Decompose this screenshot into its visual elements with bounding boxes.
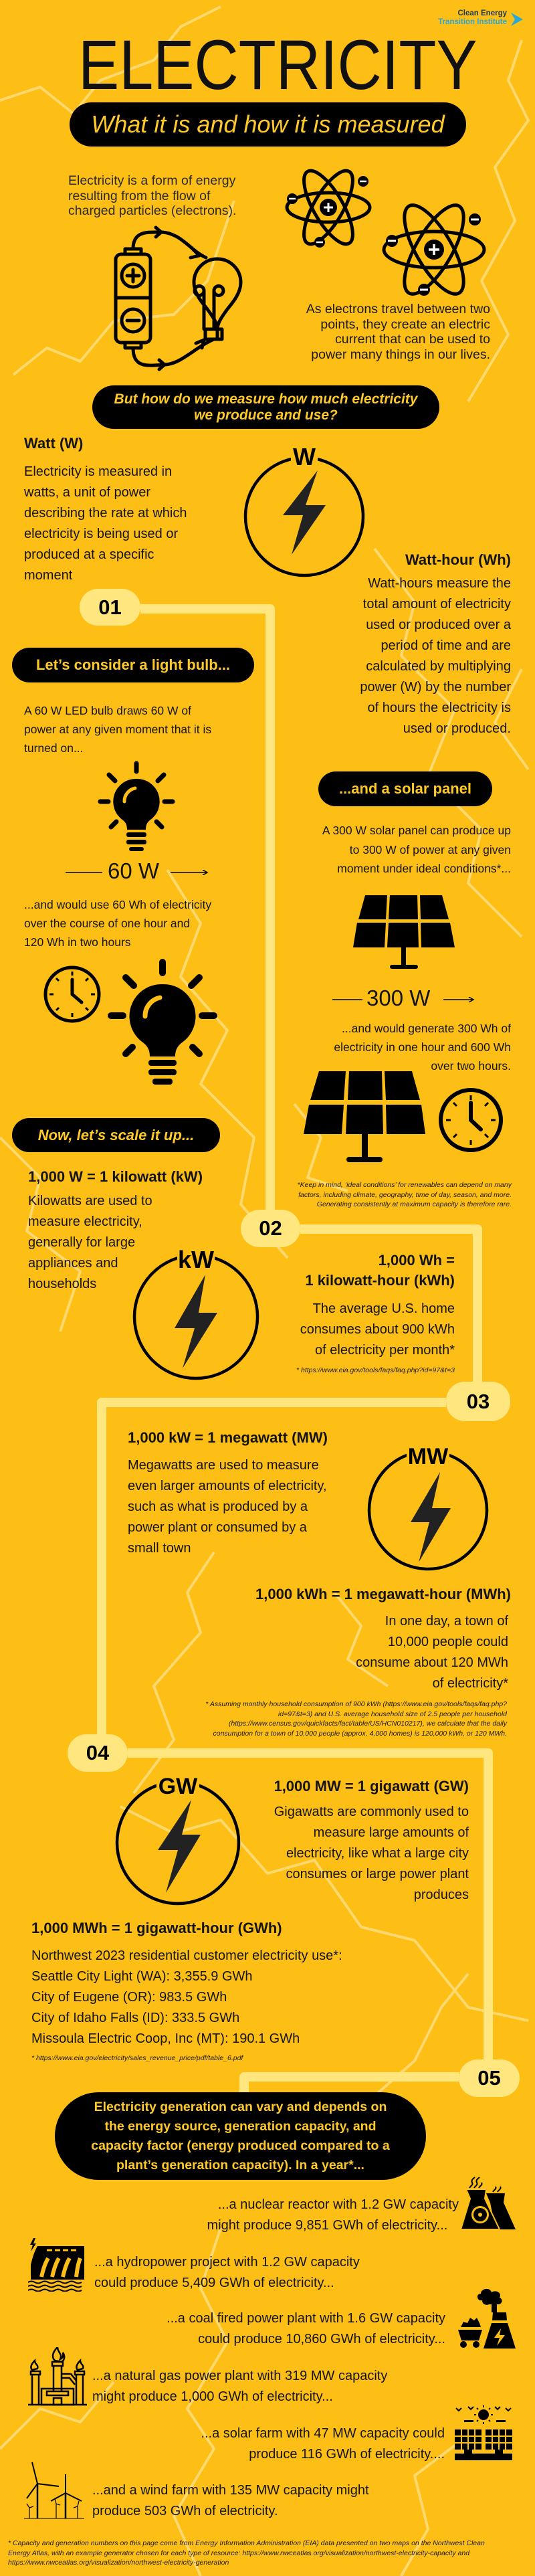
utility list: Northwest 2023 residential customer electricity use*: [31,1948,342,1963]
kilowatt-hour text: consumes about 900 kWh [300,1322,455,1337]
utility list: City of Idaho Falls (ID): 333.5 GWh [31,2011,239,2025]
footnote: ideal conditions: factors, including climate, geography, time of day, season, and more. [298,1191,512,1199]
megawatt-hour text: of electricity* [433,1676,508,1691]
icon: hydropower [28,2238,84,2292]
generation pill: the energy source, generation capacity, and [104,2118,376,2133]
gigawatt text: measure large amounts of [314,1825,469,1840]
60 W arrow [66,858,209,883]
footnote: town calc: consumption for a town of 10,000 people (approx. 4,000 homes) is 120,000 kWh, or 120 MWh. [213,1730,507,1738]
watt-hour text: used or produced over a [366,618,511,632]
utility list: Seattle City Light (WA): 3,355.9 GWh [31,1969,253,1984]
solar text 1 [322,824,511,875]
kilowatt text: appliances and [28,1256,118,1271]
kilowatt-hour heading: 1,000 Wh = [379,1252,455,1269]
icon: solar farm [455,2405,512,2463]
natural gas text: might produce 1,000 GWh of electricity... [92,2389,333,2404]
question pill [92,385,439,429]
watt-hour heading: Watt-hour (Wh) [405,551,511,568]
03 marker [446,1382,510,1421]
natural gas text: ...a natural gas power plant with 319 MW capacity [92,2369,387,2383]
footnote: data sources: Energy Atlas, with an example generator chosen for each type of resource: https://www.nwceatlas.org/visualization/northwest-electricity-capacity and [8,2549,469,2557]
footnote: eia faq: * https://www.eia.gov/tools/faqs/faq.php?id=97&t=3 [296,1366,455,1374]
generation pill: capacity factor (energy produced compared to a [91,2138,390,2153]
wind text: produce 503 GWh of electricity. [92,2504,278,2518]
solar text 1: moment under ideal conditions*... [337,862,511,875]
01 marker [80,589,140,626]
solar panel pill: ...and a solar panel [339,780,471,797]
generation pill [55,2092,426,2180]
text: electrons travel: As electrons travel between two [306,302,490,316]
300 W arrow: 300 W [366,986,430,1010]
kilowatt text: measure electricity, [28,1214,142,1229]
03 marker: 03 [467,1389,490,1413]
watt text: moment [24,568,72,583]
footnote: town calc: * Assuming monthly household consumption of 900 kWh (https://www.eia.gov/tools/faqs/faq.php? [205,1700,507,1708]
solar text 2 [334,1022,511,1073]
question pill: But how do we measure how much electricity [114,391,417,407]
nuclear text: ...a nuclear reactor with 1.2 GW capacity [218,2197,459,2212]
watt-hour text: period of time and are [381,638,511,653]
watt text: electricity is being used or [24,527,178,541]
footnote: town calc: (https://www.census.gov/quickfacts/fact/table/US/HCN010217), we calculate that the daily [229,1720,507,1728]
megawatt-hour heading: 1,000 kWh = 1 megawatt-hour (MWh) [255,1586,511,1602]
icon: wind farm [24,2461,84,2520]
bulb text 1: turned on... [24,741,84,755]
05 marker [459,2059,520,2097]
watt text: describing the rate at which [24,506,187,521]
icon: solar panel 1 [353,895,455,969]
logo: Clean Energy [457,9,507,17]
hydropower text: ...a hydropower project with 1.2 GW capacity [94,2255,360,2270]
kilowatt text [28,1194,152,1291]
bulb text 2: over the course of one hour and [24,917,190,930]
gigawatt text: produces [414,1888,469,1902]
02 marker [241,1210,300,1247]
utility list [31,1948,342,2046]
coal text [167,2311,445,2347]
subtitle pill: What it is and how it is measured [91,110,445,138]
coal text: ...a coal fired power plant with 1.6 GW capacity [167,2311,445,2326]
generation pill: Electricity generation can vary and depends on [94,2100,387,2114]
text: electrons travel: points, they create an electric [320,317,490,332]
light bulb pill [12,648,254,682]
watt-hour text: total amount of electricity [363,597,511,612]
watt-hour text [360,576,511,736]
05 marker: 05 [477,2066,501,2090]
generation pill: plant’s generation capacity). In a year*... [116,2157,364,2172]
watt text: watts, a unit of power [24,485,150,500]
logo: Transition Institute [438,18,507,26]
watt-hour text: calculated by multiplying [366,659,511,674]
footnote: town calc [205,1700,507,1738]
kilowatt-hour text [300,1301,455,1358]
hydropower text: could produce 5,409 GWh of electricity... [94,2276,334,2290]
icon: bulb small [98,761,175,851]
icon: atoms [285,169,486,296]
footnote: data sources: https://www.nwceatlas.org/visualization/northwest-electricity-generation [8,2559,229,2567]
icon: MW circle: MW [408,1444,449,1469]
kilowatt-hour text: The average U.S. home [313,1301,455,1316]
footnote: town calc: id=97&t=3) and U.S. average household size of 2.5 people per household [278,1710,507,1718]
solar farm text: ...a solar farm with 47 MW capacity could [201,2426,445,2441]
footnote: eia table: * https://www.eia.gov/electricity/sales_revenue_price/pdf/table_6.pdf [31,2054,243,2062]
watt-hour text: power (W) by the number [360,680,511,695]
icon: bulb large [108,959,217,1085]
watt-hour text: Watt-hours measure the [368,576,511,591]
icon: coal [458,2288,516,2349]
icon: clock 2 [439,1088,503,1152]
intro text [68,173,236,218]
text: electrons travel: power many things in our lives. [311,347,490,361]
wind text [92,2480,369,2522]
nuclear text: might produce 9,851 GWh of electricity... [207,2218,447,2233]
watt-hour text: of hours the electricity is [367,701,511,715]
solar farm text [201,2423,445,2465]
text: electrons travel [306,302,490,361]
megawatt-hour text: consume about 120 MWh [356,1655,508,1670]
watt heading: Watt (W) [24,435,83,452]
nuclear text [207,2197,459,2233]
megawatt text: even larger amounts of electricity, [128,1479,327,1493]
question pill: we produce and use? [194,407,338,423]
intro text: charged particles (electrons). [68,203,236,218]
icon: GW circle [115,1774,241,1906]
solar text 1: to 300 W of power at any given [350,843,511,856]
kilowatt heading: 1,000 W = 1 kilowatt (kW) [28,1168,203,1185]
solar farm text: produce 116 GWh of electricity.... [249,2447,445,2462]
megawatt text: such as what is produced by a [128,1499,308,1514]
icon: kW circle: kW [178,1246,214,1273]
megawatt text: power plant or consumed by a [128,1520,307,1535]
watt text: produced at a specific [24,547,154,562]
04 marker [68,1734,128,1772]
gigawatt text [274,1805,469,1902]
watt-hour text: used or produced. [403,721,511,736]
bulb text 2 [24,898,211,949]
kilowatt text: generally for large [28,1235,135,1250]
icon: natural gas [28,2347,87,2406]
icon: W circle [243,443,365,577]
megawatt heading: 1,000 kW = 1 megawatt (MW) [128,1429,328,1446]
megawatt text: small town [128,1541,191,1556]
icon: nuclear [461,2177,516,2229]
natural gas text [92,2369,388,2404]
02 marker: 02 [259,1216,282,1240]
gigawatt text: consumes or large power plant [286,1867,469,1881]
wind text: ...and a wind farm with 135 MW capacity might [92,2483,369,2498]
kilowatt text: households [28,1277,96,1291]
text: electrons travel: current that can be used to [335,332,490,347]
solar panel pill [318,771,492,806]
light bulb pill: Let’s consider a light bulb... [36,656,230,673]
megawatt-hour text: 10,000 people could [388,1635,508,1649]
scale up pill [12,1118,220,1152]
bulb text 1 [24,704,211,755]
intro text: Electricity is a form of energy [68,173,235,188]
watt text [24,464,187,583]
solar text 1: A 300 W solar panel can produce up [322,824,511,837]
megawatt text: Megawatts are used to measure [128,1458,319,1473]
icon: W circle: W [293,443,316,470]
04 marker: 04 [86,1741,109,1764]
gigawatt heading: 1,000 MW = 1 gigawatt (GW) [274,1778,469,1795]
watt text: Electricity is measured in [24,464,172,479]
bulb text 1: power at any given moment that it is [24,723,211,736]
solar text 2: electricity in one hour and 600 Wh [334,1040,511,1054]
icon: kW circle [132,1246,259,1380]
footnote: data sources: * Capacity and generation numbers on this page come from Energy Information Administration (EIA) data presented on two maps on the Northwest Clean [8,2539,485,2547]
utility list: City of Eugene (OR): 983.5 GWh [31,1990,227,2005]
footnote: ideal conditions [298,1181,512,1208]
gigawatt text: electricity, like what a large city [286,1846,469,1861]
coal text: could produce 10,860 GWh of electricity... [198,2332,445,2347]
300 W arrow [332,986,475,1010]
icon: battery and bulb circuit [114,226,242,371]
kilowatt-hour heading [305,1252,455,1289]
icon: clock 1 [44,966,100,1022]
megawatt-hour text: In one day, a town of [385,1614,508,1629]
logo [438,9,523,26]
60 W arrow: 60 W [108,858,159,883]
scale up pill: Now, let’s scale it up... [38,1127,194,1143]
kilowatt-hour heading: 1 kilowatt-hour (kWh) [305,1272,455,1289]
megawatt text [128,1458,327,1556]
megawatt-hour text [356,1614,508,1691]
footnote: data sources [8,2539,485,2568]
title: ELECTRICITY [78,26,477,104]
icon: GW circle: GW [158,1774,198,1799]
bulb text 2: 120 Wh in two hours [24,935,131,949]
gigawatt text: Gigawatts are commonly used to [274,1805,469,1819]
gigawatt-hour heading: 1,000 MWh = 1 gigawatt-hour (GWh) [31,1920,282,1936]
01 marker: 01 [98,595,122,618]
kilowatt-hour text: of electricity per month* [315,1343,455,1358]
icon: solar panel 2 [304,1071,425,1162]
icon: MW circle [368,1444,488,1571]
solar text 2: over two hours. [431,1059,511,1073]
footnote: ideal conditions: *Keep in mind, ‘ideal conditions’ for renewables can depend on many [298,1181,512,1189]
hydropower text [94,2255,360,2290]
bulb text 2: ...and would use 60 Wh of electricity [24,898,211,911]
utility list: Missoula Electric Coop, Inc (MT): 190.1 GWh [31,2031,300,2046]
footnote: ideal conditions: Generating consistently at maximum capacity is therefore rare. [317,1200,512,1208]
intro text: resulting from the flow of [68,189,210,203]
solar text 2: ...and would generate 300 Wh of [342,1022,511,1035]
kilowatt text: Kilowatts are used to [28,1194,152,1208]
bulb text 1: A 60 W LED bulb draws 60 W of [24,704,191,717]
subtitle pill [70,102,466,147]
